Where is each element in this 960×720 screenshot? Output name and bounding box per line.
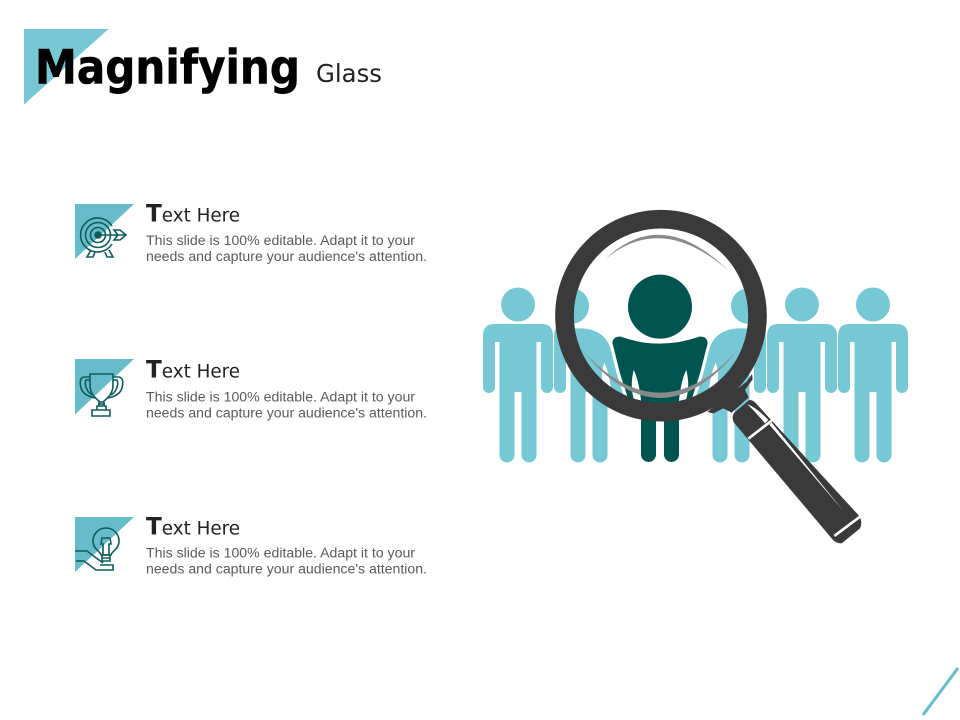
icon background triangle — [75, 204, 134, 259]
description: needs and capture your audience's attention. — [146, 562, 427, 576]
handle highlights — [748, 421, 860, 536]
icon background triangle — [75, 517, 134, 572]
description — [146, 546, 427, 576]
icon: trophy — [80, 374, 123, 416]
glass highlight bottom — [582, 349, 738, 398]
description: This slide is 100% editable. Adapt it to your — [146, 546, 416, 560]
person 1 — [483, 288, 553, 462]
description: This slide is 100% editable. Adapt it to your — [146, 390, 416, 404]
person 6 — [838, 288, 908, 462]
lens view — [574, 274, 748, 403]
heading: Text Here — [146, 512, 240, 540]
magnified side person right — [696, 288, 748, 396]
item 2: trophy — [75, 356, 427, 420]
description: This slide is 100% editable. Adapt it to your — [146, 233, 416, 248]
highlighted person legs — [641, 400, 679, 462]
item 1: target — [75, 200, 427, 264]
magnified highlighted person — [612, 275, 708, 410]
magnifying glass — [553, 219, 861, 543]
title accent triangle — [24, 29, 108, 104]
handle collar — [707, 374, 753, 413]
handle — [733, 400, 861, 543]
person 2 — [554, 288, 624, 462]
people row with magnifying glass — [483, 219, 908, 543]
person 5 — [767, 288, 837, 462]
person 4 — [696, 288, 766, 462]
description — [146, 390, 427, 420]
corner accent line — [923, 668, 958, 715]
item 3: idea — [75, 512, 427, 576]
glass ring — [564, 219, 757, 412]
icon: light bulb in hand — [75, 528, 119, 570]
description — [146, 233, 427, 264]
icon background triangle — [75, 359, 134, 414]
heading: Text Here — [146, 356, 240, 384]
magnified side person left — [574, 290, 624, 394]
description: needs and capture your audience's attention. — [146, 249, 427, 264]
title: Magnifying — [35, 40, 300, 96]
glass highlight top — [605, 235, 728, 271]
heading: Text Here — [146, 200, 240, 228]
icon: target with arrow — [81, 218, 126, 257]
title: Glass — [316, 59, 382, 88]
description: needs and capture your audience's attention. — [146, 406, 427, 420]
